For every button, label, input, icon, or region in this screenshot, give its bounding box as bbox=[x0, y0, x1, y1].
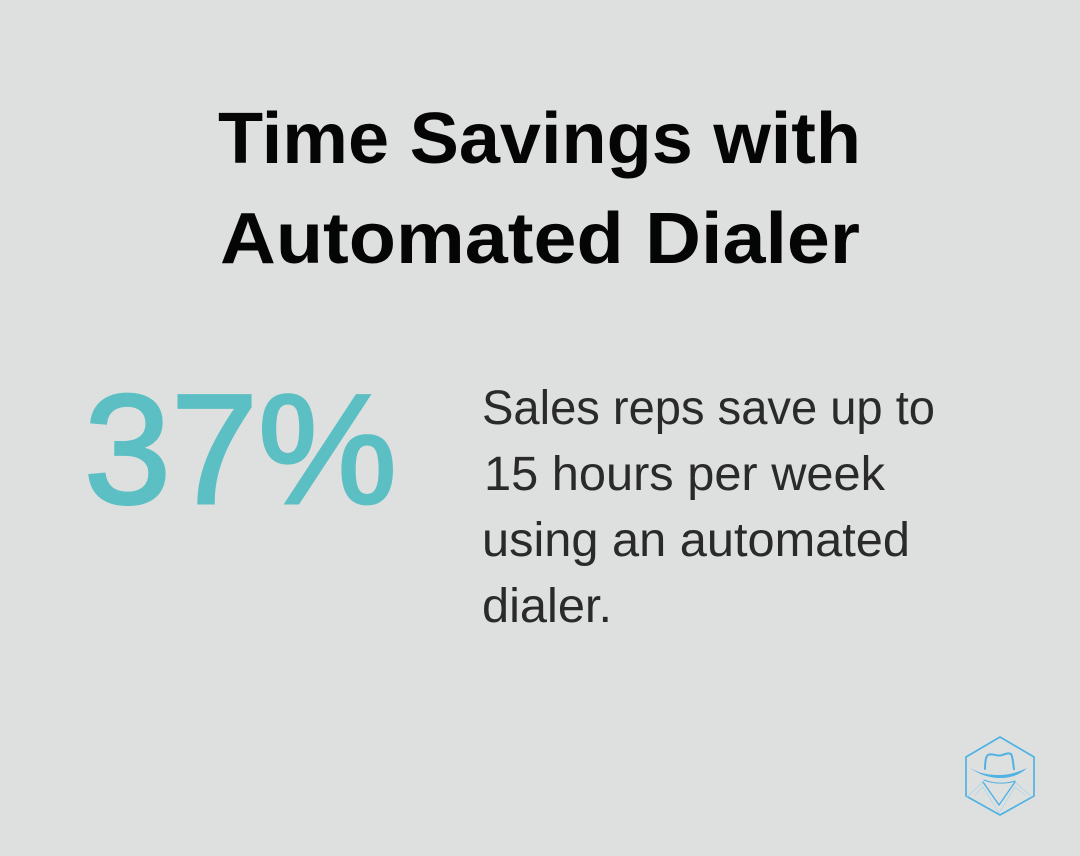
description text bbox=[482, 382, 935, 633]
title: Time Savings with bbox=[218, 99, 861, 179]
title bbox=[218, 99, 861, 279]
description text: 15 hours per week bbox=[484, 448, 886, 501]
description text: dialer. bbox=[482, 580, 612, 633]
big percentage statistic: 37% bbox=[84, 363, 397, 537]
description text: using an automated bbox=[482, 514, 910, 567]
icon: spy logo hexagon bbox=[966, 737, 1034, 815]
description text: Sales reps save up to bbox=[482, 382, 935, 435]
title: Automated Dialer bbox=[220, 199, 860, 279]
